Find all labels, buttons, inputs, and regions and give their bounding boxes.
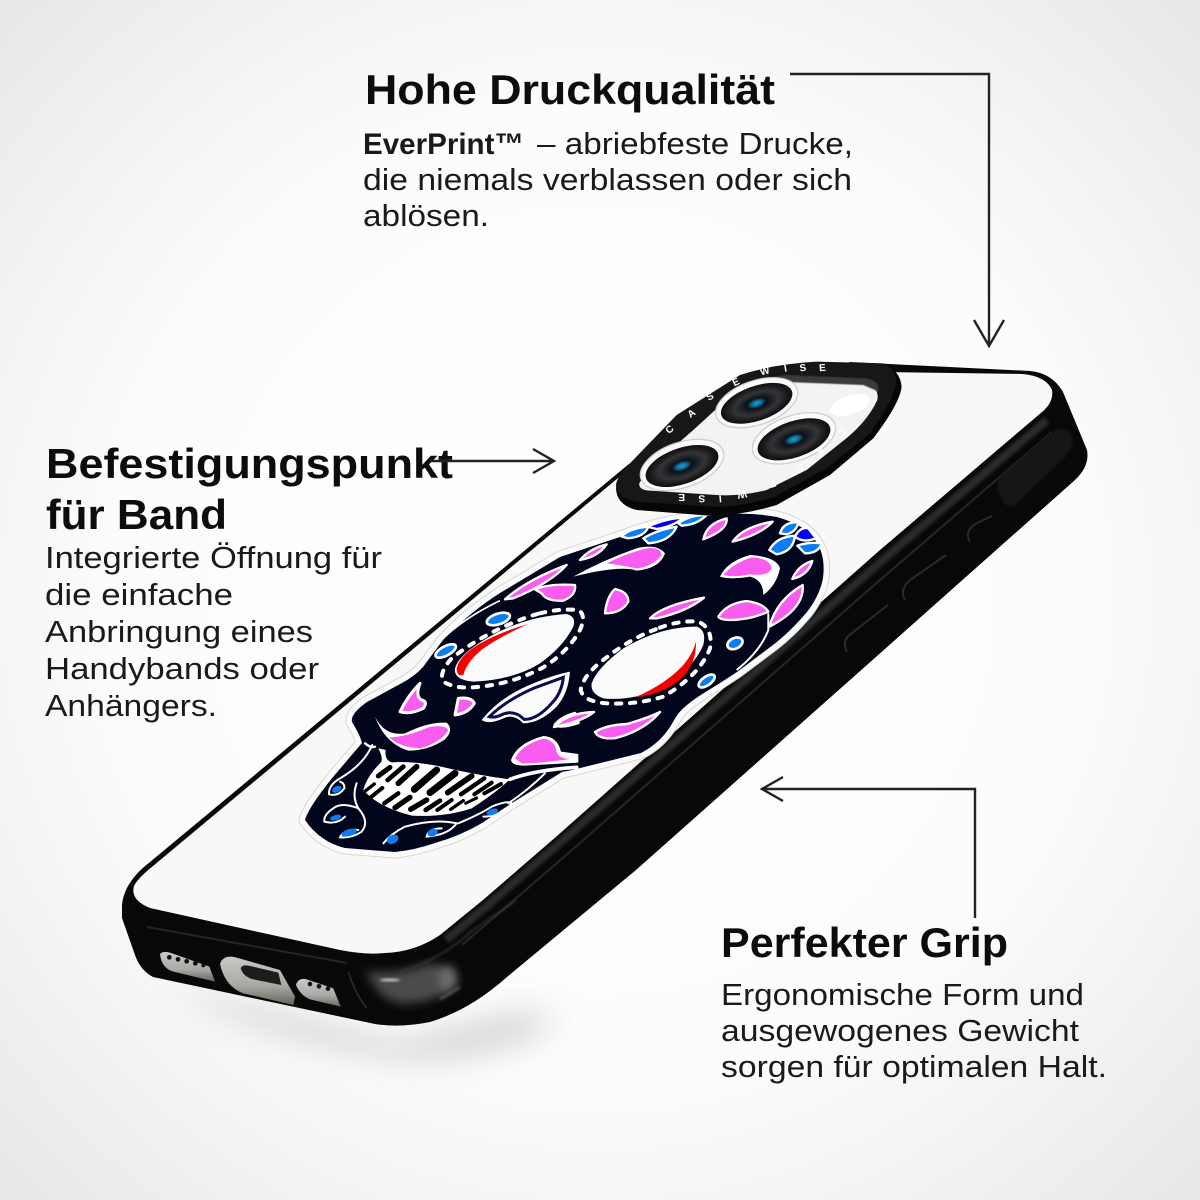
- callout: grip: [721, 919, 1107, 1084]
- forehead petals: [505, 565, 575, 601]
- skull silhouette: [305, 514, 824, 852]
- mouth swoosh: [375, 717, 450, 751]
- nose outer: [482, 672, 570, 723]
- charging ports: [160, 952, 341, 1007]
- heading: Perfekter Grip: [721, 919, 1008, 966]
- lower cheek petals: [554, 712, 660, 738]
- body text: – abriebfeste Drucke,: [537, 126, 853, 161]
- camera control pad: [997, 428, 1072, 506]
- USB port: [220, 957, 295, 1005]
- bumper lettering: S: [799, 363, 807, 374]
- bumper lettering: C: [835, 425, 848, 438]
- camera well shade: [733, 375, 879, 393]
- sugar skull print: [305, 514, 824, 852]
- temple swirl: [737, 613, 768, 670]
- upper teeth: [378, 767, 501, 794]
- sticker outline: [305, 514, 824, 852]
- bumper lettering: W: [736, 488, 748, 500]
- body text: Handybands oder: [45, 651, 319, 686]
- teeth plate: [363, 748, 510, 816]
- sticker white edge: [305, 514, 824, 852]
- nose inner: [489, 677, 563, 719]
- bottom corner sheen: [348, 900, 517, 1008]
- crown swoosh: [573, 547, 665, 577]
- bumper lettering: C: [664, 424, 676, 437]
- arrow: grip: [762, 777, 975, 918]
- heading: Befestigungspunkt: [46, 440, 453, 487]
- lens top: [709, 368, 804, 437]
- clear back panel: [133, 372, 1052, 954]
- forehead swirl: [445, 601, 500, 637]
- right speaker holes: [308, 982, 330, 991]
- body text: sorgen für optimalen Halt.: [721, 1049, 1107, 1084]
- body text: ablösen.: [363, 198, 489, 233]
- left eye dashes: [442, 610, 583, 688]
- body text: Integrierte Öffnung für: [45, 540, 382, 575]
- lower cheek swoosh: [511, 736, 578, 766]
- bumper lettering: E: [731, 376, 742, 389]
- arrow: strap attachment: [430, 449, 554, 473]
- left speaker grille: [160, 952, 215, 982]
- bumper top face: [616, 362, 896, 507]
- case body: [122, 362, 1088, 1026]
- swirl lines: [324, 743, 577, 843]
- body text: Anhängers.: [45, 688, 217, 723]
- right eye red crescent: [637, 642, 696, 697]
- body text: die niemals verblassen oder sich: [363, 162, 852, 197]
- skull right eye and crown: [573, 515, 822, 704]
- left eye socket: [455, 614, 574, 682]
- flowers: [622, 515, 822, 554]
- body text: [363, 126, 853, 233]
- bumper lettering: E: [819, 363, 827, 374]
- heading: Hohe Druckqualität: [365, 66, 775, 113]
- bumper lettering: S: [705, 391, 716, 404]
- lens right: [746, 403, 842, 474]
- bumper lettering: A: [814, 444, 826, 457]
- heading: [46, 440, 453, 538]
- body text: [721, 977, 1107, 1084]
- flash: [827, 390, 873, 420]
- bumper lettering: S: [794, 461, 805, 474]
- bumper lettering: W: [759, 365, 772, 378]
- bumper lettering: I: [718, 492, 722, 503]
- skull left eye and nose: [433, 565, 583, 723]
- heading: für Band: [46, 491, 227, 538]
- side button outlines: [845, 516, 992, 652]
- bumper lettering: A: [686, 407, 698, 421]
- side band ridge: [462, 432, 1052, 945]
- callout: print quality: [363, 66, 853, 233]
- crown petals: [580, 518, 812, 627]
- right eye dashes: [581, 621, 711, 704]
- lower teeth: [366, 784, 477, 810]
- blue dots: [433, 610, 511, 660]
- bumper lettering: I: [783, 364, 788, 375]
- phone case: [122, 362, 1088, 1026]
- camera bumper: [616, 363, 902, 516]
- body text: Anbringung eines: [45, 614, 313, 649]
- body text: [45, 540, 382, 723]
- cheek petals: [400, 683, 578, 726]
- bumper lettering: S: [698, 492, 705, 503]
- skull lower left: jaw, teeth and swirls: [324, 683, 578, 846]
- bumper lettering: E: [767, 477, 778, 489]
- jaw blue dots: [329, 784, 499, 846]
- side rim sheen: [446, 420, 1047, 940]
- blue dots: [697, 635, 744, 690]
- left speaker holes: [167, 955, 205, 967]
- body text: Ergonomische Form und: [721, 977, 1084, 1012]
- body text: EverPrint™: [363, 128, 524, 161]
- right big swoosh: [720, 555, 780, 595]
- callout: strap attachment: [45, 440, 453, 723]
- body text: ausgewogenes Gewicht: [721, 1013, 1079, 1048]
- right eye socket: [591, 627, 704, 699]
- USB opening: [241, 965, 281, 985]
- phone shadow: [170, 985, 560, 1060]
- camera module: [616, 362, 902, 516]
- bottom face ridge: [147, 927, 347, 963]
- camera glass: [639, 380, 878, 495]
- bumper lettering: E: [678, 491, 685, 502]
- arrow: print quality: [790, 74, 1004, 346]
- bumper lettering: [664, 363, 848, 503]
- body text: die einfache: [45, 577, 233, 612]
- left eye red crescent: [457, 624, 528, 675]
- lens left: [634, 429, 730, 501]
- right speaker grille: [296, 979, 341, 1007]
